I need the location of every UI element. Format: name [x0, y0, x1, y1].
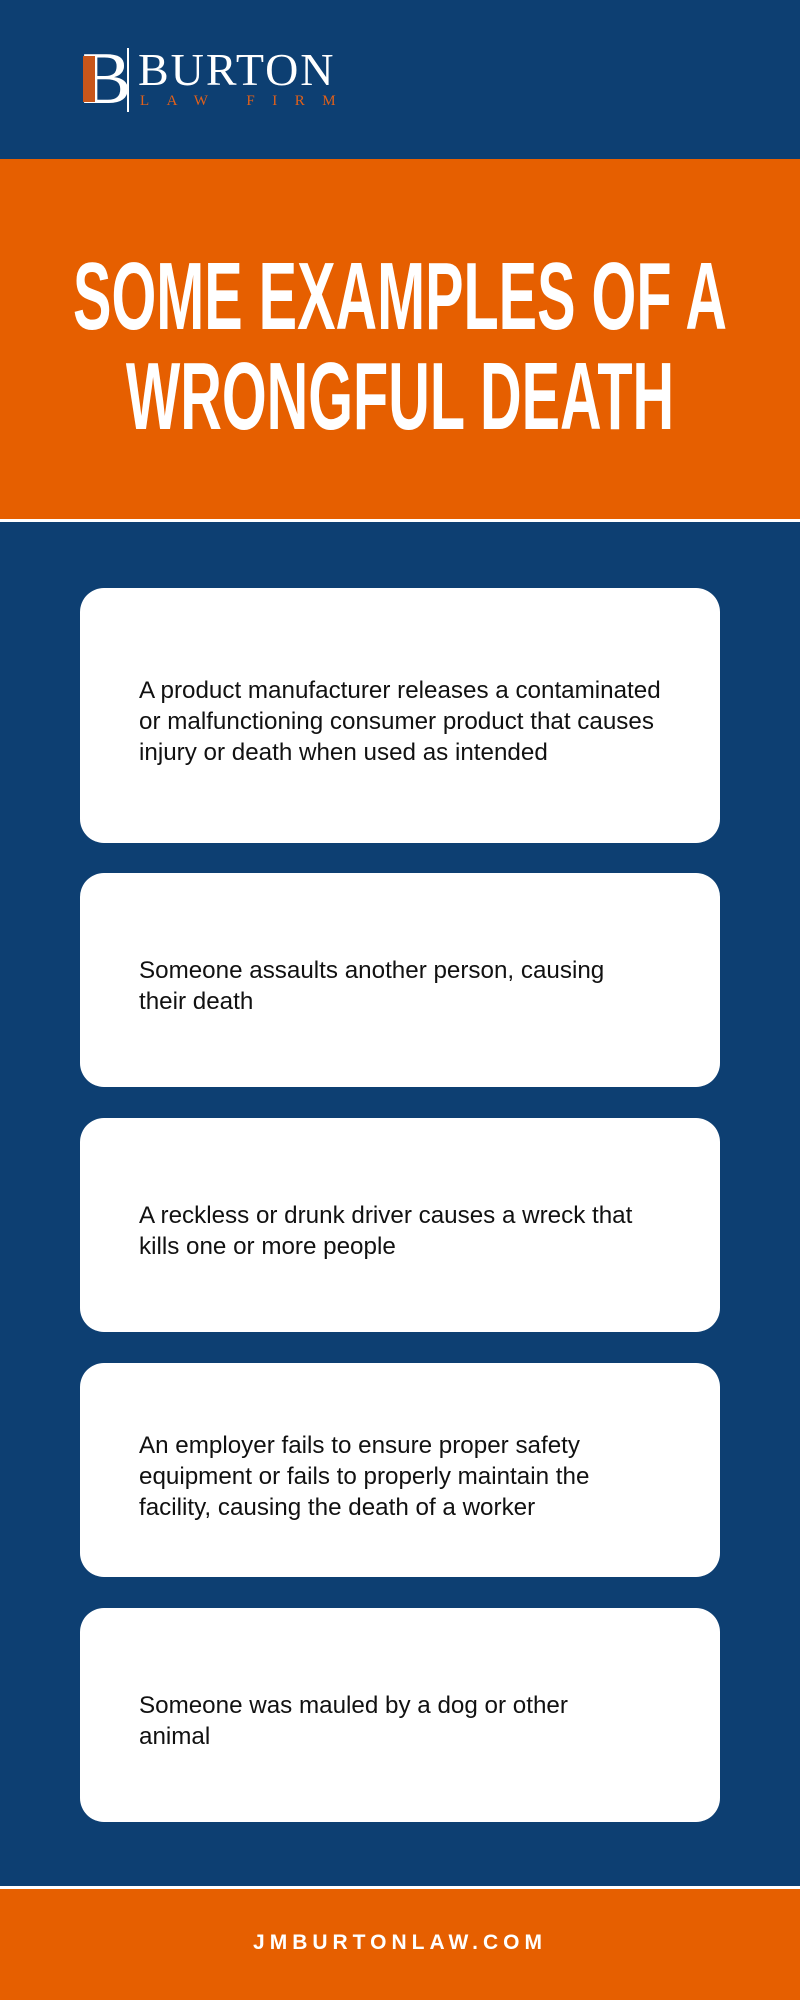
card 1	[80, 588, 720, 843]
card 1: or malfunctioning consumer product that causes	[139, 708, 654, 735]
card 4: facility, causing the death of a worker	[139, 1494, 535, 1520]
card 4	[80, 1363, 720, 1577]
card 1: injury or death when used as intended	[139, 739, 548, 766]
footer	[0, 1886, 800, 2000]
card 1: A product manufacturer releases a contaminated	[139, 677, 661, 704]
card 5: animal	[139, 1723, 210, 1750]
logo: LAW FIRM	[140, 93, 353, 109]
title	[73, 243, 727, 450]
card 4: An employer fails to ensure proper safety	[139, 1432, 580, 1458]
card 2: Someone assaults another person, causing	[139, 957, 604, 984]
title band	[0, 159, 800, 522]
logo text: BURTON	[138, 44, 336, 95]
logo	[82, 38, 353, 120]
card 3: A reckless or drunk driver causes a wreck that	[139, 1202, 632, 1229]
footer url: JMBURTONLAW.COM	[253, 1931, 547, 1954]
card 3	[80, 1118, 720, 1332]
card 5	[80, 1608, 720, 1822]
card 5: Someone was mauled by a dog or other	[139, 1692, 568, 1719]
card 3: kills one or more people	[139, 1233, 396, 1260]
title: SOME EXAMPLES OF A	[73, 243, 727, 350]
card 2	[80, 873, 720, 1087]
title: WRONGFUL DEATH	[126, 343, 674, 450]
icon: B with column: B	[82, 38, 131, 120]
card 2: their death	[139, 988, 253, 1015]
header band	[0, 0, 800, 156]
card 4: equipment or fails to properly maintain the	[139, 1462, 589, 1490]
